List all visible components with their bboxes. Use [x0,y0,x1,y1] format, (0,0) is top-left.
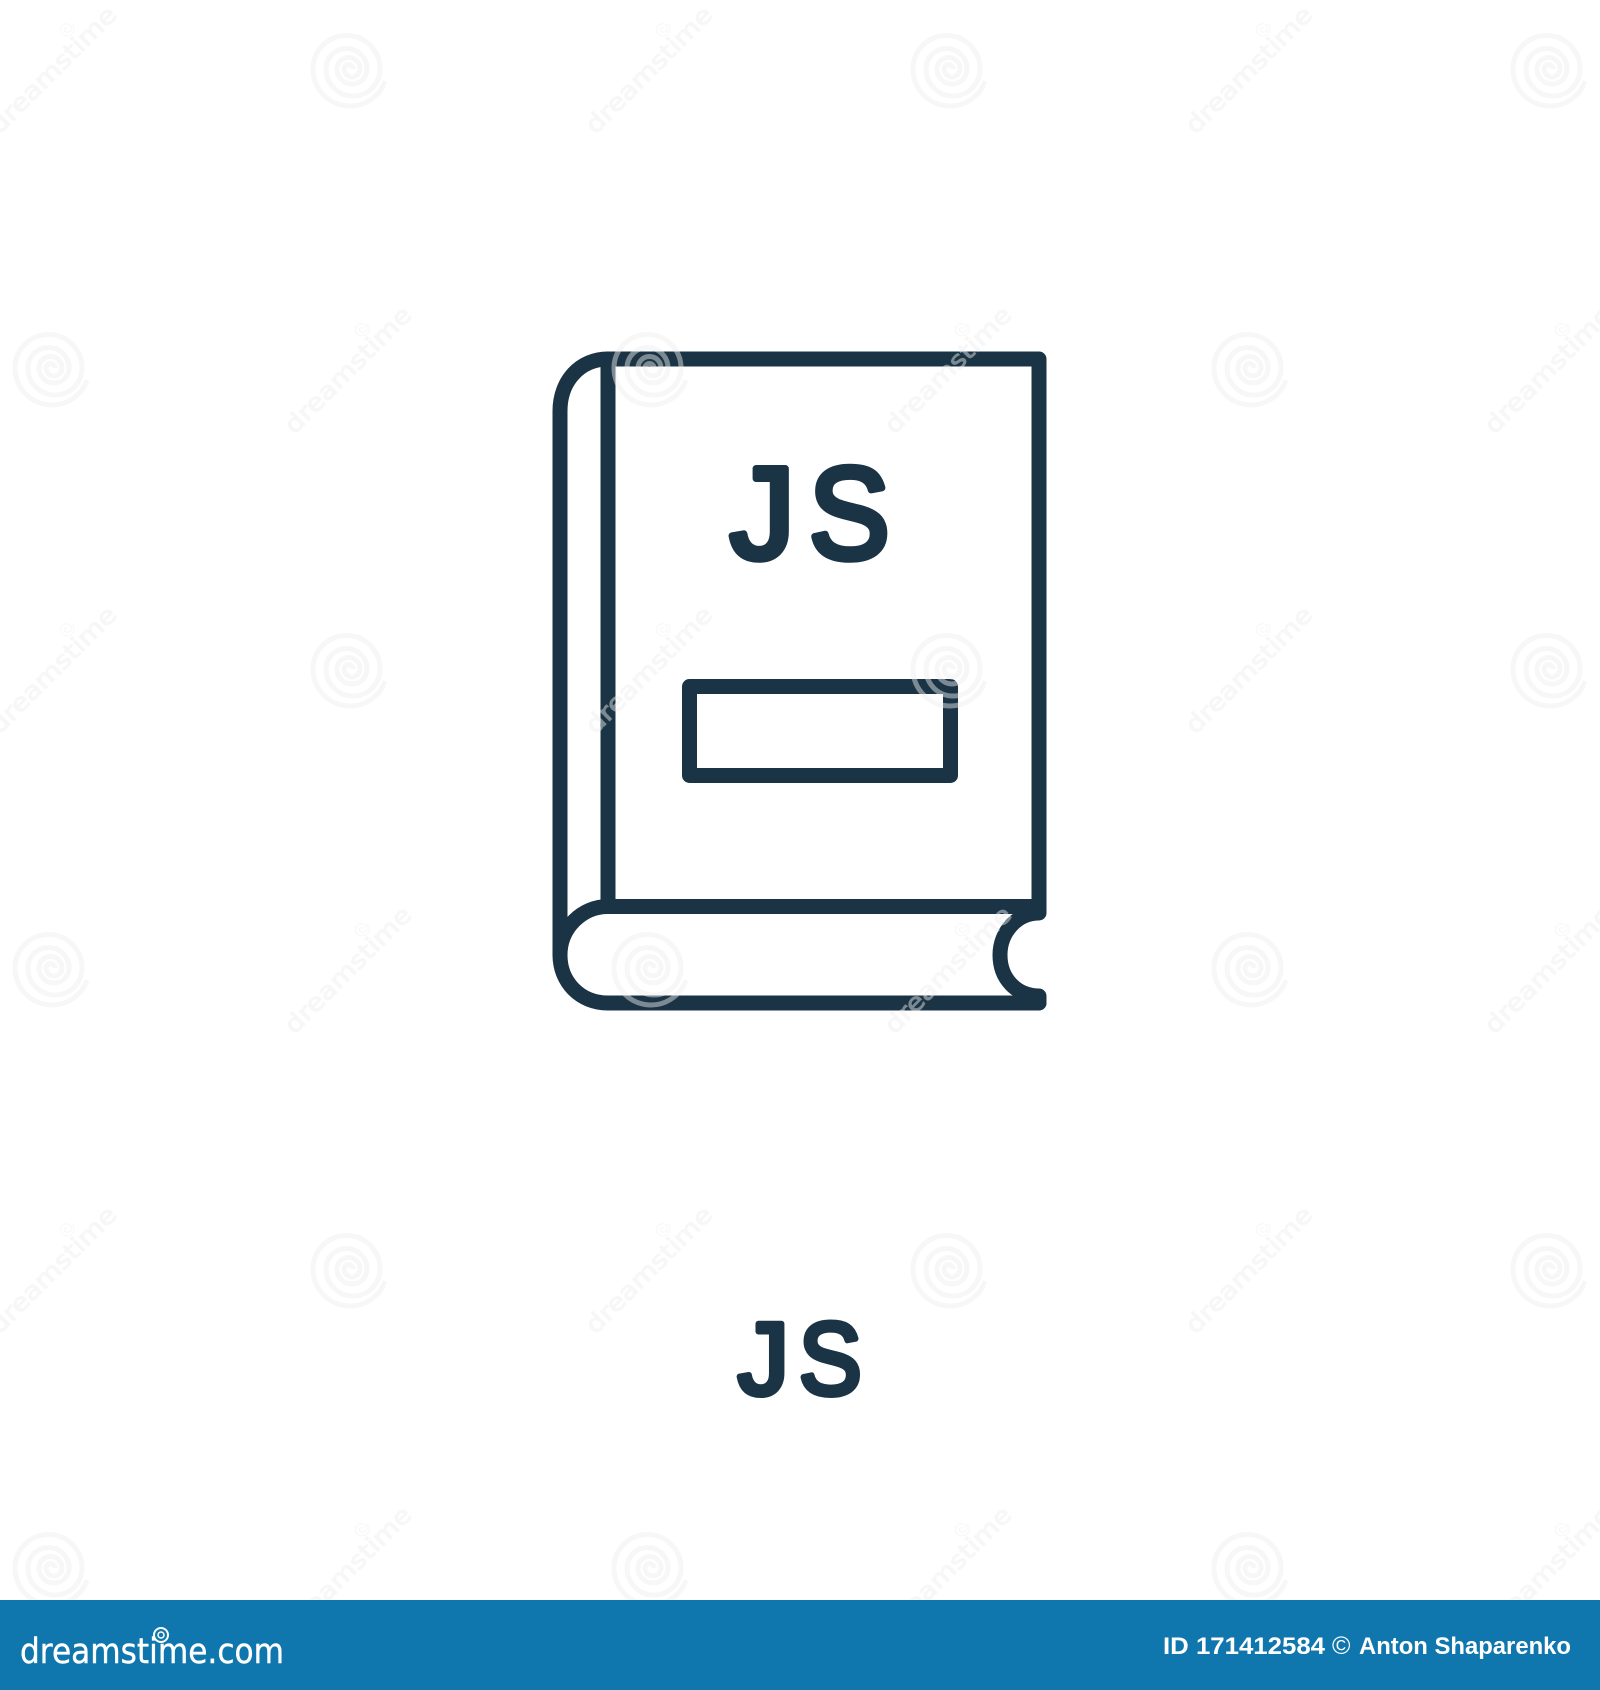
footer logo: dreamstime.com: dreamstime.com [20,1632,284,1672]
footer credit: ID 171412584 [1163,1633,1326,1660]
cover text: JS [730,440,890,586]
watermark pattern: dreamstime [580,1,718,139]
footer credit: Anton Shaparenko [1359,1633,1571,1660]
watermark pattern: dreamstime [279,1501,417,1639]
watermark pattern: dreamstime [1479,901,1600,1039]
watermark pattern: dreamstime [580,1201,718,1339]
book bottom pages [560,906,1039,1003]
footer credit: © [1332,1632,1351,1660]
watermark pattern: dreamstime [279,901,417,1039]
icon: JS book [560,359,1039,1003]
book spine line [600,359,616,906]
cover text: JS: J [730,440,795,586]
watermark pattern: dreamstime [580,601,718,739]
watermark pattern: dreamstime [879,1501,1017,1639]
heading: JS: J [738,1302,789,1416]
watermark pattern: dreamstime [279,301,417,439]
cover text: JS: S [809,440,890,586]
watermark pattern: dreamstime [1180,1,1318,139]
watermark pattern: dreamstime [879,901,1017,1039]
watermark pattern: dreamstime [1479,1501,1600,1639]
watermark pattern: dreamstime [1180,1201,1318,1339]
watermark pattern: dreamstime [1180,601,1318,739]
icon: logo spiral [154,1628,168,1642]
footer credit [1163,1632,1571,1660]
watermark pattern: dreamstime [1479,301,1600,439]
book cover outline [560,359,1039,1003]
heading: JS: S [799,1301,862,1416]
heading: JS [738,1301,862,1416]
watermark pattern: dreamstime [879,301,1017,439]
footer bar [0,1600,1600,1690]
cover label rectangle [690,686,950,776]
